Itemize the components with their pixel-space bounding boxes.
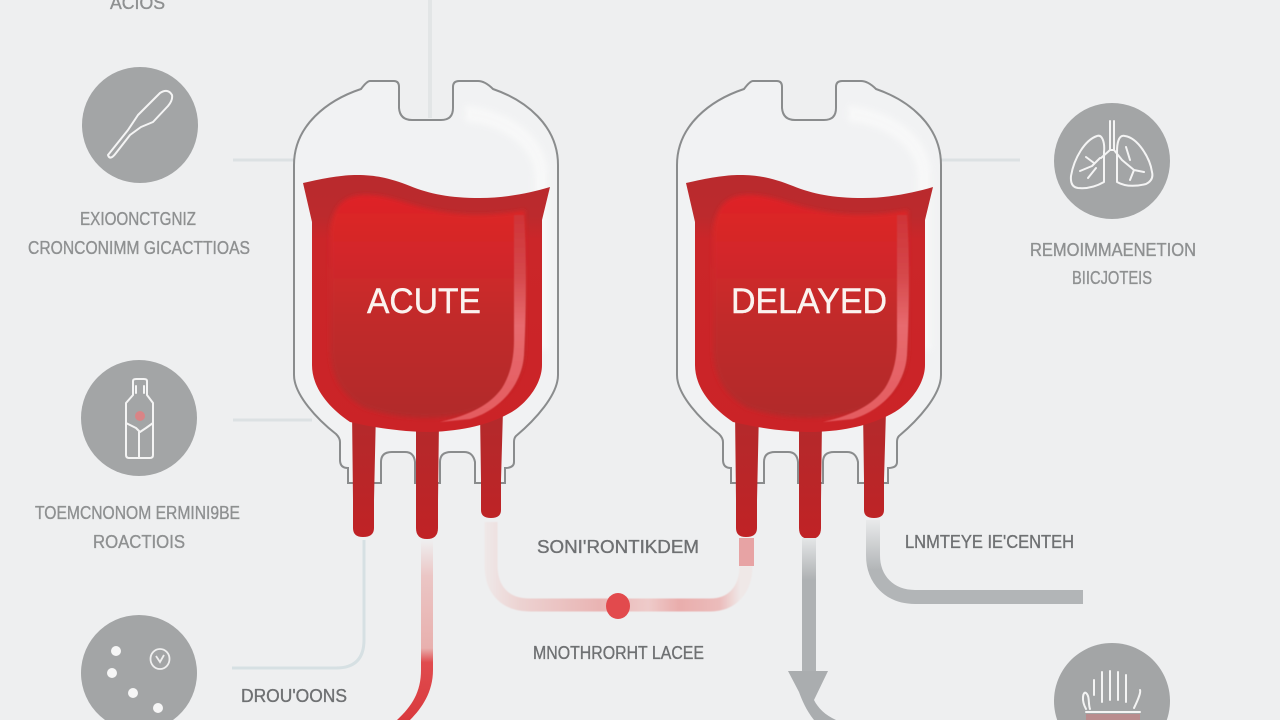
text block: centre upper caption: SONI'RONTIKDEM (537, 537, 699, 557)
icon disc (82, 67, 198, 183)
arrow head (788, 671, 836, 720)
caption line 2: BIICJOTEIS (1072, 268, 1152, 288)
icon: thermometer (82, 67, 198, 183)
tube 1 (735, 410, 759, 537)
grey tube: delayed right outlet (873, 520, 1083, 597)
bottle glyph (126, 379, 153, 458)
tube path (491, 522, 746, 605)
caption line 2: ROACTIOIS (93, 532, 185, 552)
icon: lungs (1054, 103, 1170, 219)
text block: first left caption (28, 209, 250, 258)
text block: right middle caption: LNMTEYE IE'CENTEH (905, 532, 1074, 552)
caption line 2: CRONCONIMM GICACTTIOAS (28, 238, 250, 258)
grey arrow: delayed centre outlet (788, 538, 836, 720)
text block: bottom left caption: DROU'OONS (241, 686, 347, 706)
icon disc (81, 615, 197, 720)
cell dots (107, 646, 163, 713)
connector lines (232, 0, 1020, 668)
blood shine (823, 215, 909, 422)
tube right stub (739, 538, 754, 566)
caption line 1: EXIOONCTGNIZ (80, 209, 196, 229)
arrow shaft (802, 538, 816, 678)
crown red band (1086, 714, 1140, 720)
tube 2 (799, 420, 822, 539)
icon: cells (81, 615, 197, 720)
bag highlight (465, 105, 548, 350)
tubes (352, 410, 503, 539)
crown glyph (1083, 671, 1140, 712)
tube 1 (352, 410, 376, 537)
text block: centre lower caption: MNOTHRORHT LACEE (533, 643, 704, 663)
bag shell (294, 81, 558, 483)
tube node (606, 593, 630, 619)
bag: acute (294, 81, 558, 539)
text block: upper right caption (1030, 240, 1196, 288)
large cell (150, 649, 170, 669)
blood inner glow (330, 195, 525, 418)
blood fill (686, 175, 933, 432)
icon: brush crown (1054, 643, 1170, 720)
icon: bottle (81, 360, 197, 476)
text block: second left caption (35, 503, 240, 552)
blood shine (440, 215, 526, 422)
tubes (735, 410, 886, 539)
icon disc (81, 360, 197, 476)
icon disc (1054, 643, 1170, 720)
blood fill (303, 175, 550, 432)
bag: delayed (677, 81, 941, 539)
caption line 1: TOEMCNONOM ERMINI9BE (35, 503, 240, 523)
icon disc (1054, 103, 1170, 219)
pink tube: acute centre outlet (397, 540, 433, 720)
blood inner glow (713, 195, 908, 418)
label: acute: ACUTE (367, 282, 481, 321)
label: delayed: DELAYED (731, 282, 887, 321)
caption line 1: REMOIMMAENETION (1030, 240, 1196, 260)
lungs glyph (1071, 121, 1152, 188)
tube 3 (863, 410, 886, 518)
tube 3 (480, 410, 503, 518)
bottle red mark (135, 411, 145, 421)
bag highlight (848, 105, 931, 350)
thermometer glyph (108, 91, 172, 158)
tube 2 (416, 420, 439, 539)
bag shell (677, 81, 941, 483)
pink tube: linked outlets (491, 522, 754, 619)
